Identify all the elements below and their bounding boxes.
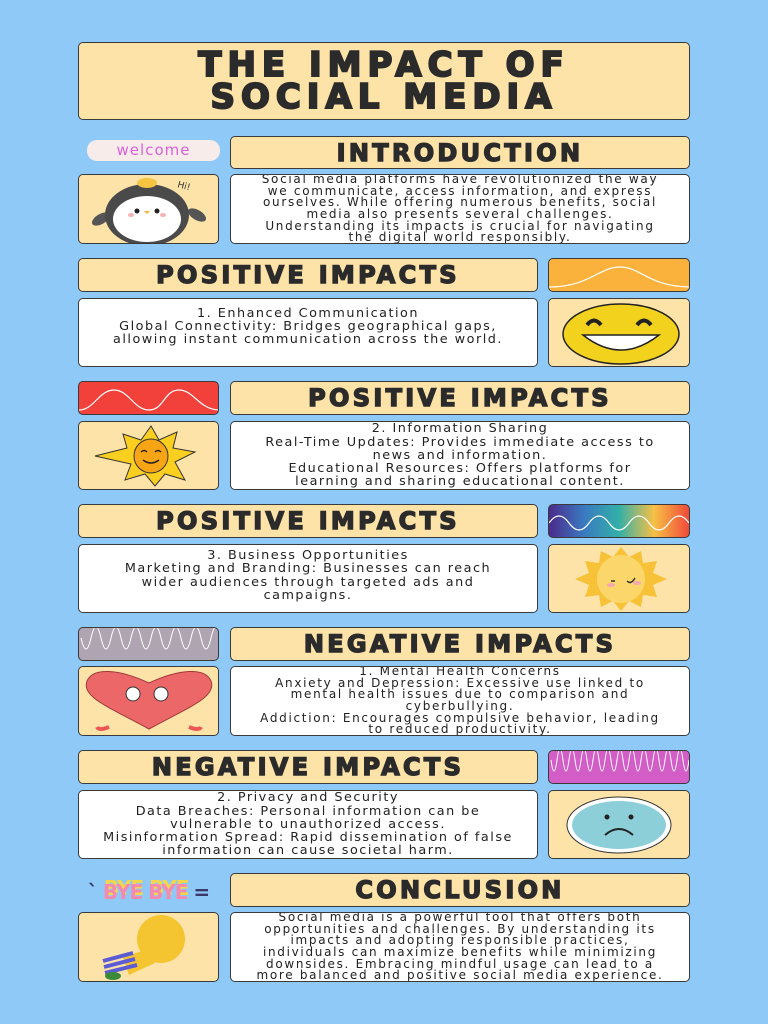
heading: positive 3 (78, 504, 538, 538)
wave red (78, 381, 219, 415)
heading: conclusion (230, 873, 690, 907)
text: negative 1: to reduced productivity. (368, 722, 552, 736)
text: positive 3 (78, 544, 538, 613)
wave orange (548, 258, 690, 292)
text: positive 2: learning and sharing educational content. (295, 474, 625, 489)
text: conclusion: more balanced and positive social media experience. (256, 968, 664, 982)
text: conclusion: opportunities and challenges. By understanding its (264, 922, 656, 936)
text: negative 2: Data Breaches: Personal information can be (136, 804, 480, 819)
text: positive 3: 3. Business Opportunities (207, 548, 409, 563)
text: positive 2: 2. Information Sharing (372, 421, 548, 436)
text: introduction: Understanding its impacts is crucial for navigating (265, 219, 655, 233)
text: positive 2: Educational Resources: Offers platforms for (288, 461, 632, 476)
text: introduction: the digital world responsibly. (348, 230, 572, 244)
heading: introduction (230, 136, 690, 169)
text: positive 1: 1. Enhanced Communication (197, 306, 419, 321)
heading: positive 2: POSITIVE IMPACTS (308, 384, 612, 412)
text: introduction: we communicate, access information, and express (268, 184, 652, 198)
welcome pill: welcome (117, 141, 190, 159)
heading: positive 3: POSITIVE IMPACTS (156, 507, 460, 535)
text: conclusion: downsides. Embracing mindful usage can lead to a (266, 957, 654, 971)
text: positive 3: Marketing and Branding: Businesses can reach (125, 561, 491, 576)
heading: negative 1 (230, 627, 690, 661)
icon: cute sun (548, 544, 690, 613)
icon: penguin: Hi! (176, 180, 191, 193)
text: introduction: media also presents several challenges. (306, 207, 614, 221)
wave rainbow (548, 504, 690, 538)
title: SOCIAL MEDIA (210, 77, 558, 117)
icon: grin (548, 298, 690, 367)
icon: sad face (548, 790, 690, 859)
heading: negative 2 (78, 750, 538, 784)
text: introduction: ourselves. While offering numerous benefits, social (263, 195, 657, 209)
heading: positive 1: POSITIVE IMPACTS (156, 261, 460, 289)
text: negative 1: Anxiety and Depression: Excessive use linked to (275, 676, 645, 690)
text: negative 1: Addiction: Encourages compulsive behavior, leading (260, 711, 660, 725)
text: negative 2: 2. Privacy and Security (217, 790, 399, 805)
text: positive 1: allowing instant communication across the world. (113, 332, 503, 347)
text: conclusion (230, 912, 690, 982)
text: negative 1 (230, 666, 690, 736)
text: negative 2: vulnerable to unauthorized access. (170, 817, 446, 832)
icon: sun (78, 421, 219, 490)
title: THE IMPACT OF (198, 45, 570, 85)
text: negative 1: mental health issues due to comparison and (291, 687, 629, 701)
text: positive 3: campaigns. (264, 588, 352, 603)
wave magenta (548, 750, 690, 784)
icon: light bulb (78, 912, 219, 982)
heading: negative 1: NEGATIVE IMPACTS (304, 630, 616, 658)
text: conclusion: individuals can maximize benefits while minimizing (263, 945, 657, 959)
text: positive 1 (78, 298, 538, 367)
heading: introduction: INTRODUCTION (337, 138, 583, 166)
text: positive 2: Real-Time Updates: Provides immediate access to (265, 435, 655, 450)
icon: sad heart (78, 666, 219, 736)
title (78, 42, 690, 120)
text: negative 2: Misinformation Spread: Rapid dissemination of false (103, 830, 513, 845)
welcome pill (87, 140, 220, 161)
text: positive 2: news and information. (373, 448, 547, 463)
heading: conclusion: CONCLUSION (355, 876, 565, 904)
wave gray (78, 627, 219, 661)
text: introduction (230, 174, 690, 244)
text: negative 1: cyberbullying. (406, 699, 514, 713)
heading: positive 1 (78, 258, 538, 292)
heading: negative 2: NEGATIVE IMPACTS (152, 753, 464, 781)
heading: positive 2 (230, 381, 690, 415)
text: positive 1: Global Connectivity: Bridges geographical gaps, (119, 319, 497, 334)
text: conclusion: impacts and adopting responsible practices, (290, 933, 630, 947)
text: positive 2 (230, 421, 690, 490)
bye bye text: ˋ BYE BYE = (88, 880, 209, 904)
text: positive 3: wider audiences through targeted ads and (142, 574, 474, 590)
icon: penguin (78, 174, 219, 244)
text: negative 2 (78, 790, 538, 859)
text: negative 2: information can cause societal harm. (162, 843, 454, 858)
